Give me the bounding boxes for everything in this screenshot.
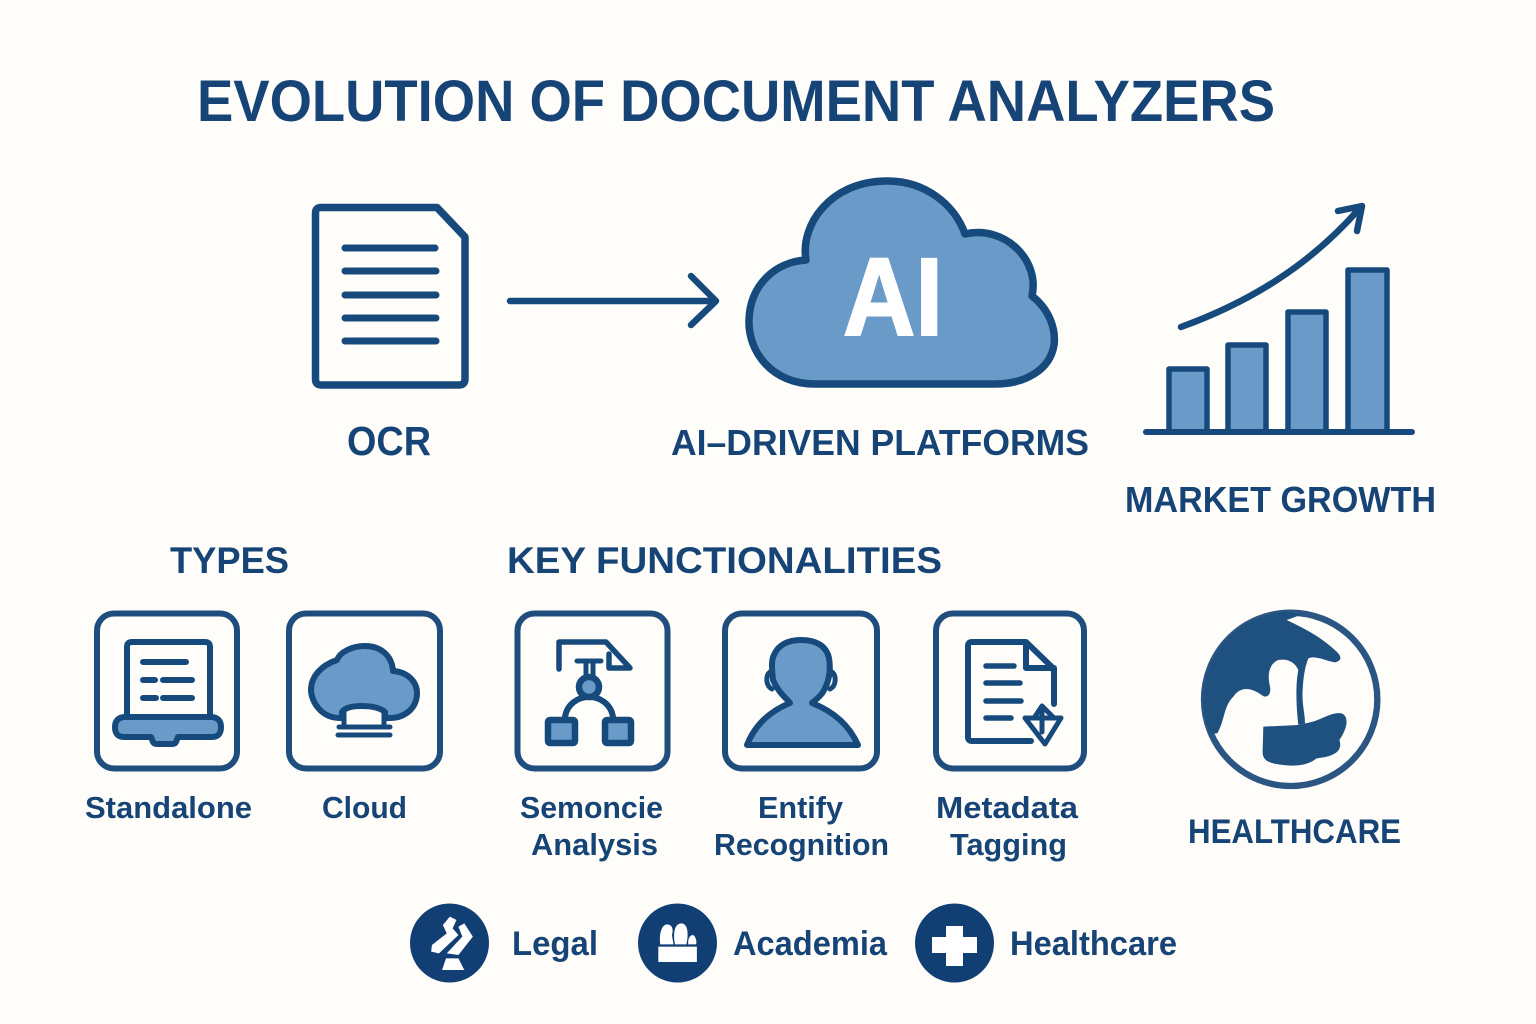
- icon: OCR document: [316, 208, 465, 385]
- label: healthcare: HEALTHCARE: [1188, 813, 1401, 851]
- badge: academia: [638, 904, 717, 982]
- icon: gavel: [431, 917, 473, 970]
- label: legal: Legal: [512, 925, 598, 963]
- card: standalone: [97, 614, 237, 768]
- card: cloud: [289, 614, 440, 768]
- label: semantic analysis: Semoncie: [520, 790, 663, 825]
- heading: types: TYPES: [170, 540, 289, 581]
- badge: legal: [410, 904, 489, 982]
- label: metadata tagging: Metadata: [936, 790, 1079, 825]
- icon: laptop: [115, 642, 221, 744]
- label: metadata tagging: [936, 790, 1079, 862]
- card: entity recognition: [725, 614, 877, 768]
- label: entity recognition: [714, 790, 889, 862]
- card: semantic analysis: [518, 614, 668, 768]
- icon: healthcare globe: [1203, 612, 1377, 786]
- label: semantic analysis: [520, 790, 663, 862]
- label: academia: Academia: [733, 925, 888, 963]
- label: OCR: OCR: [347, 418, 431, 464]
- AI lettering: AI: [843, 236, 943, 359]
- label: semantic analysis: Analysis: [531, 827, 658, 862]
- icon: medical cross: [932, 926, 977, 966]
- card: metadata tagging: [936, 614, 1084, 768]
- label: healthcare sector: Healthcare: [1010, 925, 1177, 963]
- label: entity recognition: Recognition: [714, 827, 889, 862]
- arrow: OCR to AI platforms: [510, 276, 716, 325]
- chart: market growth bars and arrow: [1146, 206, 1412, 432]
- label: metadata tagging: Tagging: [950, 827, 1067, 862]
- label: AI-driven platforms: AI–DRIVEN PLATFORMS: [671, 422, 1089, 463]
- icon: person: [747, 640, 858, 745]
- icon: cloud with device: [311, 646, 417, 735]
- badge: healthcare: [915, 904, 994, 982]
- label: entity recognition: Entify: [758, 790, 844, 825]
- label: standalone: Standalone: [85, 790, 252, 825]
- icon: document hierarchy: [548, 642, 631, 743]
- icon: AI cloud: [749, 181, 1054, 384]
- icon: group at desk: [658, 923, 697, 962]
- title: EVOLUTION OF DOCUMENT ANALYZERS: [197, 69, 1275, 134]
- label: cloud: Cloud: [322, 790, 407, 825]
- icon: tagged document: [968, 642, 1061, 744]
- heading: key functionalities: KEY FUNCTIONALITIES: [507, 540, 942, 581]
- label: market growth: MARKET GROWTH: [1125, 479, 1436, 520]
